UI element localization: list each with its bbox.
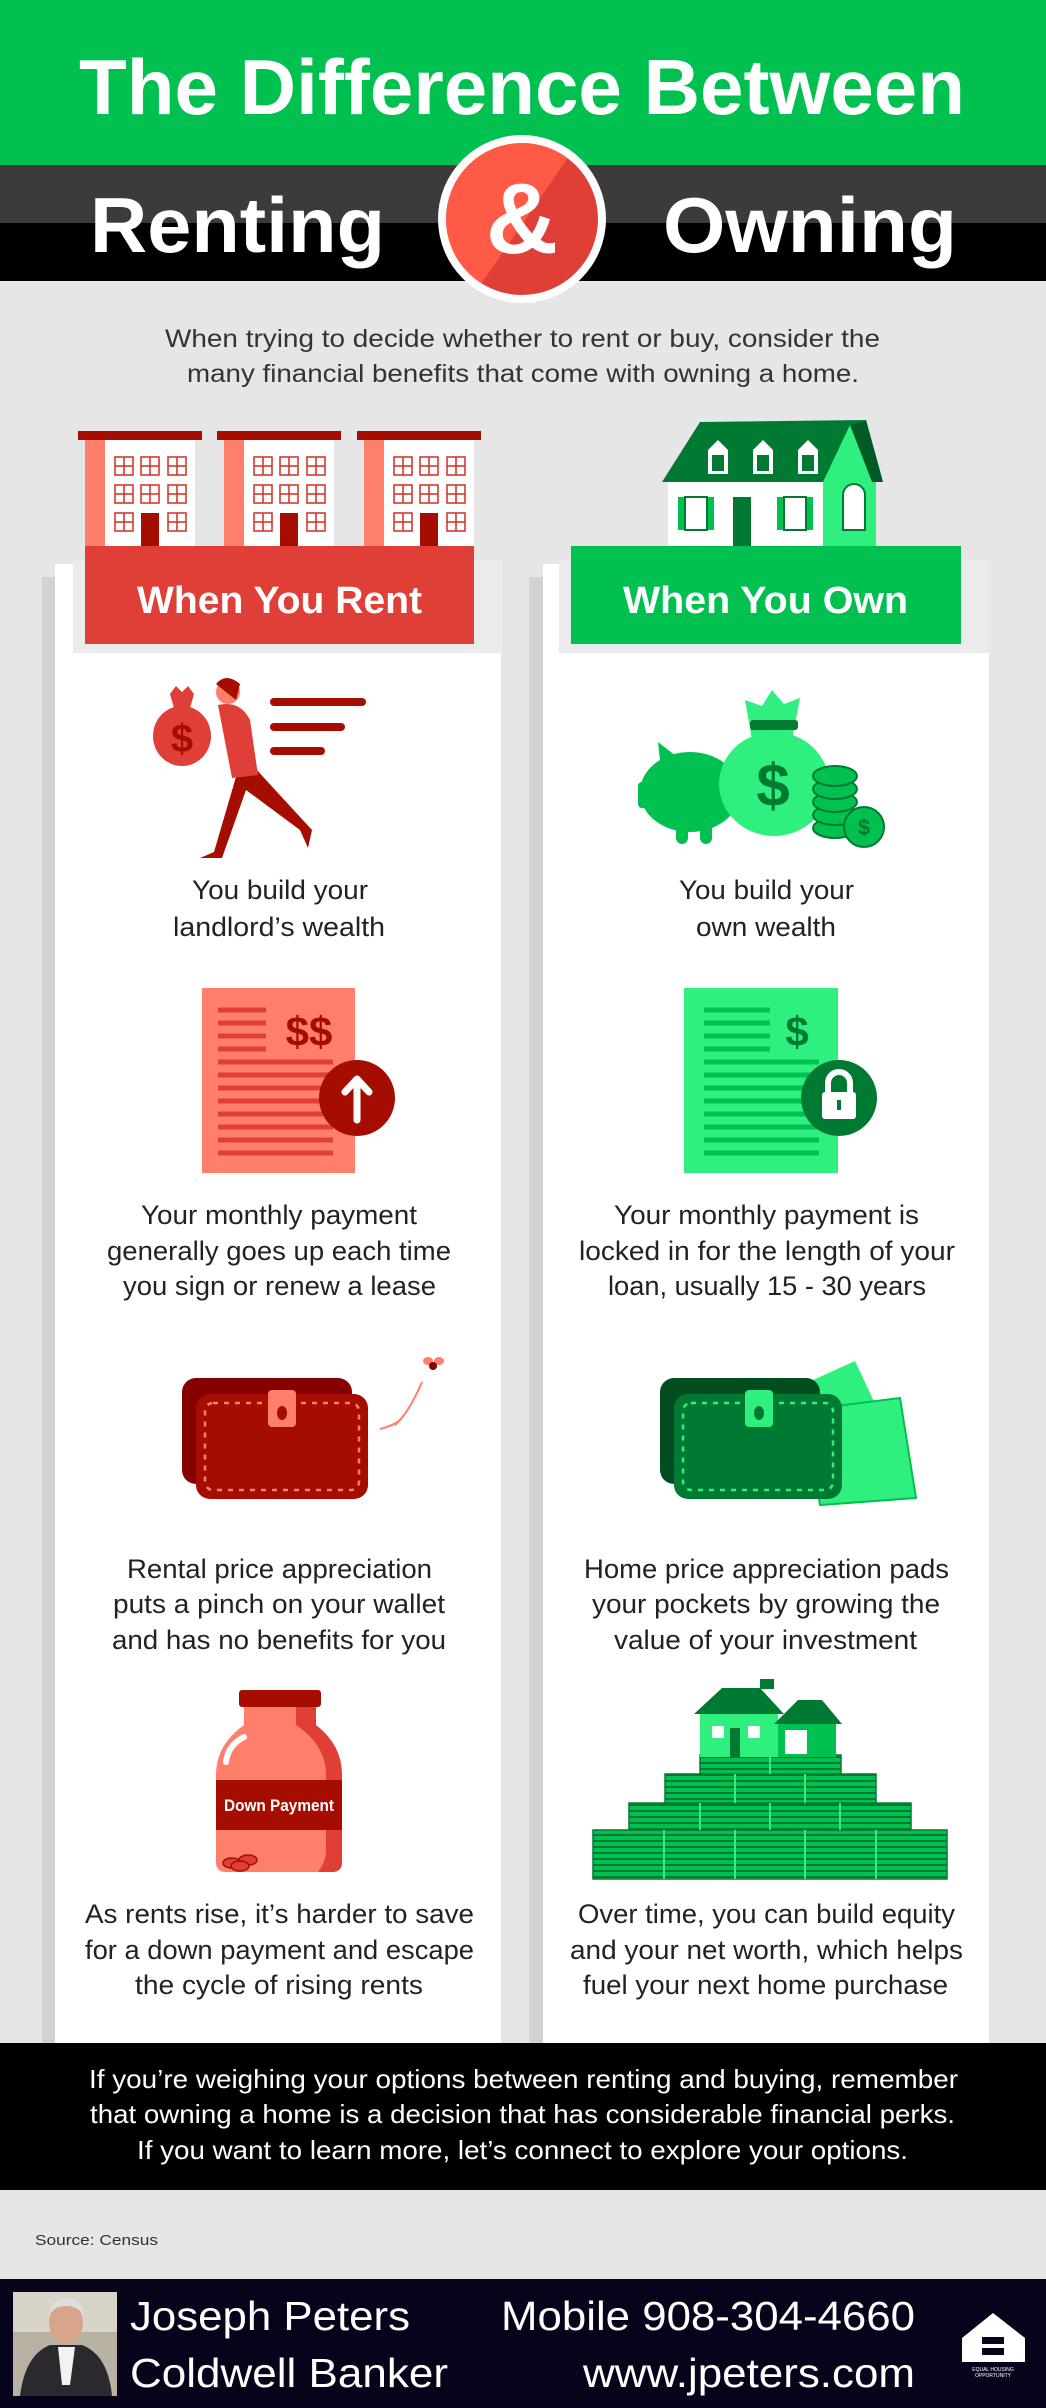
text: rent row 1: landlord’s wealth	[173, 912, 385, 942]
text: own row 4: fuel your next home purchase	[583, 1970, 948, 2000]
text: own row 4: and your net worth, which helps	[570, 1935, 963, 1965]
text: own row 1: own wealth	[696, 912, 836, 942]
panel: rent	[42, 560, 502, 2043]
text: rent row 2: Your monthly payment	[141, 1200, 418, 1230]
intro text: When trying to decide whether to rent or buy, consider the	[165, 325, 880, 353]
source note: Source: Census	[35, 2232, 158, 2249]
subtitle: owning: Owning	[663, 181, 957, 269]
text: own row 1: You build your	[679, 875, 854, 905]
agent footer bar: Mobile 908-304-4660	[501, 2293, 915, 2339]
agent footer bar	[0, 2279, 1046, 2408]
agent footer bar: www.jpeters.com	[582, 2350, 915, 2396]
text: own row 3: Home price appreciation pads	[584, 1554, 949, 1584]
conclusion band: If you want to learn more, let’s connect to explore your options.	[137, 2135, 908, 2165]
text: rent row 3	[112, 1554, 446, 1655]
text: own row 2: loan, usually 15 - 30 years	[608, 1271, 926, 1301]
icon: down payment jar: Down Payment	[224, 1796, 334, 1815]
icon: rent document with up arrow	[202, 988, 395, 1173]
icon: piggy bank and money bag: $	[858, 815, 870, 840]
text: rent row 4: the cycle of rising rents	[135, 1970, 423, 2000]
text: own row 2	[579, 1200, 955, 1301]
intro text: many financial benefits that come with owning a home.	[187, 360, 859, 388]
text: rent row 3: Rental price appreciation	[127, 1554, 432, 1584]
icon: house	[662, 420, 883, 546]
text: rent row 3: and has no benefits for you	[112, 1625, 446, 1655]
icon: green wallet with bills	[660, 1361, 916, 1505]
text: own row 3: your pockets by growing the	[592, 1589, 940, 1619]
text: rent row 2: generally goes up each time	[107, 1236, 451, 1266]
icon: empty red wallet with fly	[182, 1357, 444, 1499]
icon: equal housing opportunity: OPPORTUNITY	[975, 2373, 1012, 2379]
banner: when you rent	[85, 546, 474, 644]
panel: own	[529, 560, 989, 2043]
agent footer bar: Coldwell Banker	[130, 2350, 448, 2396]
icon: rent document with up arrow: $$	[286, 1008, 332, 1055]
icon: piggy bank and money bag	[638, 690, 884, 847]
icon: down payment jar	[216, 1690, 342, 1872]
text: rent row 3: puts a pinch on your wallet	[113, 1589, 446, 1619]
text: own row 4	[570, 1899, 963, 2000]
ampersand badge	[438, 135, 610, 303]
text: rent row 4: As rents rise, it’s harder to save	[85, 1899, 474, 1929]
text: own row 3: value of your investment	[614, 1625, 918, 1655]
text: rent row 1	[173, 875, 385, 942]
conclusion band: that owning a home is a decision that has considerable financial perks.	[90, 2099, 955, 2129]
icon: own document with lock: $	[785, 1008, 809, 1055]
icon: man carrying money bag: $	[171, 717, 193, 761]
icon: piggy bank and money bag: $	[756, 752, 790, 819]
conclusion band: If you’re weighing your options between renting and buying, remember	[89, 2064, 958, 2094]
text: rent row 4: for a down payment and escape	[85, 1935, 474, 1965]
icon: apartment buildings	[78, 431, 481, 546]
icon: equal housing opportunity: EQUAL HOUSING	[972, 2367, 1014, 2373]
text: own row 2: Your monthly payment is	[614, 1200, 919, 1230]
intro text	[165, 325, 880, 388]
icon: equal housing opportunity	[962, 2313, 1025, 2379]
text: own row 3	[584, 1554, 949, 1655]
subtitle: renting: Renting	[90, 181, 385, 269]
ampersand badge: &	[486, 163, 558, 275]
text: own row 1	[679, 875, 854, 942]
text: rent row 2	[107, 1200, 451, 1301]
banner: when you own: When You Own	[623, 580, 908, 622]
banner: when you rent: When You Rent	[137, 580, 422, 622]
header	[0, 0, 1046, 281]
text: own row 2: locked in for the length of your	[579, 1236, 955, 1266]
agent footer bar: Joseph Peters	[130, 2293, 410, 2339]
conclusion band	[0, 2043, 1046, 2190]
icon: man carrying money bag	[153, 678, 362, 858]
banner: when you own	[571, 546, 961, 644]
text: rent row 1: You build your	[192, 875, 368, 905]
title: The Difference Between	[79, 43, 965, 131]
icon: own document with lock	[684, 988, 877, 1173]
text: rent row 4	[85, 1899, 474, 2000]
agent photo	[13, 2292, 117, 2396]
icon: house on money pyramid	[593, 1679, 947, 1879]
text: own row 4: Over time, you can build equity	[578, 1899, 956, 1929]
text: rent row 2: you sign or renew a lease	[123, 1271, 436, 1301]
